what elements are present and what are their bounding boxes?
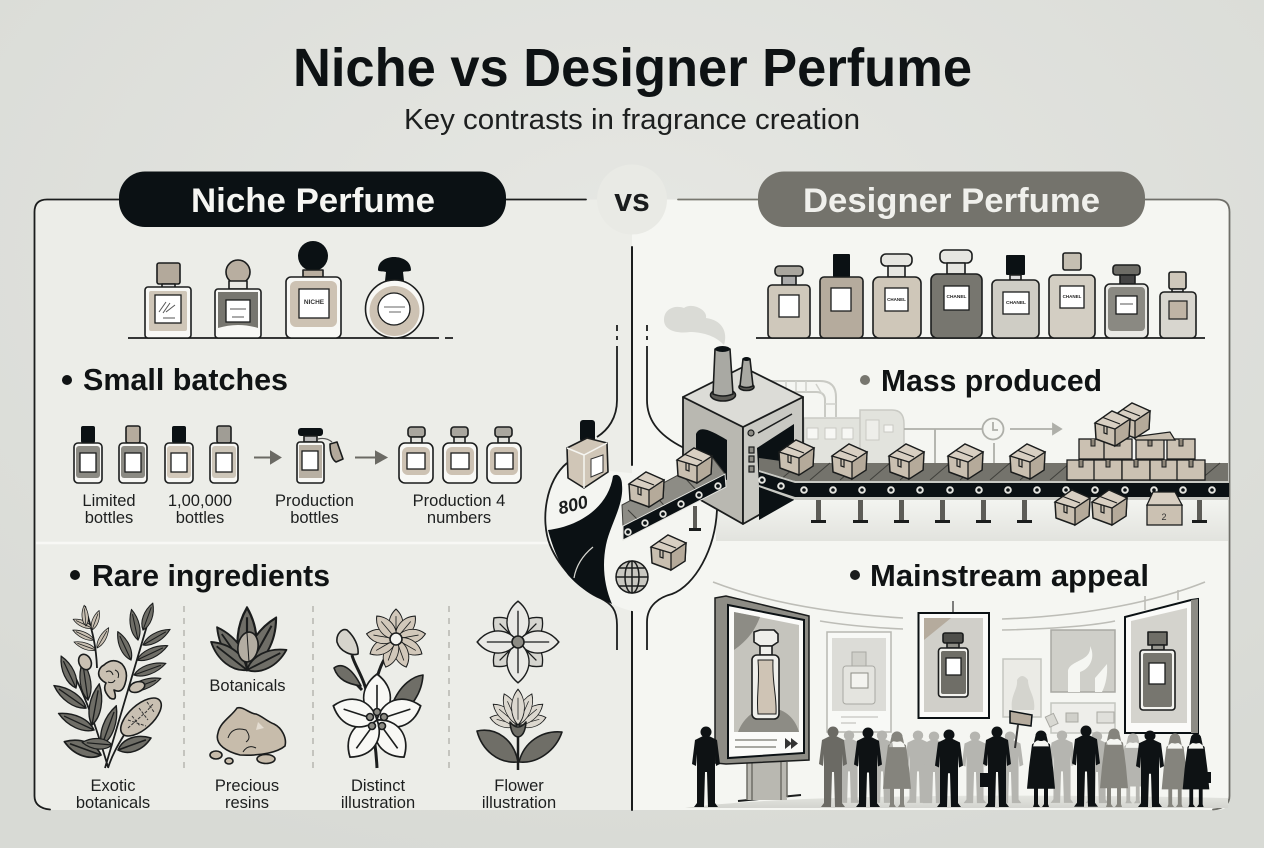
bottle 2 [820,254,863,338]
bottle 5: CHANEL [1006,300,1026,306]
background factory [770,381,904,464]
designer bottle shelf [756,250,1205,338]
bottle 3: CHANEL [887,297,906,302]
spray bottle [297,428,343,483]
bottle 4 [931,250,982,338]
bottle 5 [992,255,1039,338]
icon: globe [616,561,648,593]
factory smoke [664,306,725,345]
captions: ingredients: illustration [482,794,556,812]
bottle 2 [215,260,261,338]
panel: niche perfume background [34,200,632,810]
heading pill: niche perfume [119,172,506,227]
bottle 3: NICHE [304,299,325,306]
arrow [254,452,280,463]
bullet: small batches: Small batches [83,362,288,397]
poster: center [918,601,989,718]
held sign [1010,711,1032,748]
small batch bottles row 1 [74,426,238,483]
illustration: exotic botanicals [51,602,172,768]
bottle 3 [873,254,921,338]
bottle 6: CHANEL [1063,294,1082,299]
small batch captions: 1,00,000 [168,492,232,510]
vs badge [597,164,667,234]
illustration: bottom flower [477,689,562,770]
bottle 6 [1049,253,1095,338]
heading pill: niche perfume: Niche Perfume [191,182,435,220]
captions: ingredients: botanicals [76,794,150,812]
bottle 4: CHANEL [946,294,967,300]
niche bottle shelf [128,241,453,338]
small batch captions: Production [275,492,354,510]
production bottles row [399,427,521,483]
captions: ingredients [76,777,556,812]
box stack: 2 [1161,512,1167,522]
bottle 3 [286,241,341,338]
subtitle: Key contrasts in fragrance creation [404,104,860,136]
heading: mass produced: Mass produced [881,363,1102,398]
heading pill: designer perfume [758,172,1145,227]
process line with clock [904,418,1061,463]
small batch captions [82,492,505,527]
floor [685,796,1228,808]
captions: ingredients: Precious [215,777,279,795]
bottle 1 [768,266,810,338]
gallery ceiling arcs [713,582,1205,630]
lower-section divider [36,542,560,544]
caption: botanicals: Botanicals [209,677,286,695]
small batch captions: Production 4 [413,492,505,510]
illustration: precious resins [210,708,285,764]
small batch captions: bottles [85,509,133,527]
illustration: botanicals [206,608,290,677]
panel frame strokes [34,200,1230,810]
crowd: foreground figures [692,726,1211,807]
vs badge: vs [614,182,650,218]
left conveyor [622,448,726,540]
center perfume bottle [567,420,608,488]
bottle 4 [366,257,424,338]
billboard: left [715,596,809,801]
faded posters [827,630,1115,733]
crowd: background figures [836,712,1146,803]
boxes on belt [779,440,1045,479]
captions: ingredients: Exotic [91,777,135,795]
bottle 1 [145,263,191,338]
captions: ingredients: illustration [341,794,415,812]
small batch captions: bottles [290,509,339,527]
captions: ingredients: Flower [494,777,544,795]
captions: ingredients: resins [225,794,269,812]
captions: ingredients: Distinct [351,777,405,795]
illustration: top flower [477,601,559,683]
arrow [355,452,386,463]
emblem: central swirl: 800 [556,492,590,518]
chimneys [710,346,754,401]
billboard: right [1125,599,1198,733]
bottle 8 [1160,272,1196,338]
emblem: central swirl [545,325,717,650]
falling box [651,535,686,570]
small batch captions: bottles [176,509,224,527]
panel: designer perfume background [632,200,1230,810]
heading: mainstream appeal: Mainstream appeal [870,558,1149,593]
box stack [1055,403,1205,525]
factory machine [683,346,803,524]
small batch captions: Limited [82,492,136,510]
bottle 7 [1105,265,1148,338]
bullet: rare ingredients: Rare ingredients [92,558,330,593]
illustration: distinct flowers [329,609,427,768]
heading pill: designer perfume: Designer Perfume [803,182,1100,220]
main conveyor belt [759,458,1229,523]
title: Niche vs Designer Perfume [293,38,972,98]
small batch captions: numbers [427,509,491,527]
